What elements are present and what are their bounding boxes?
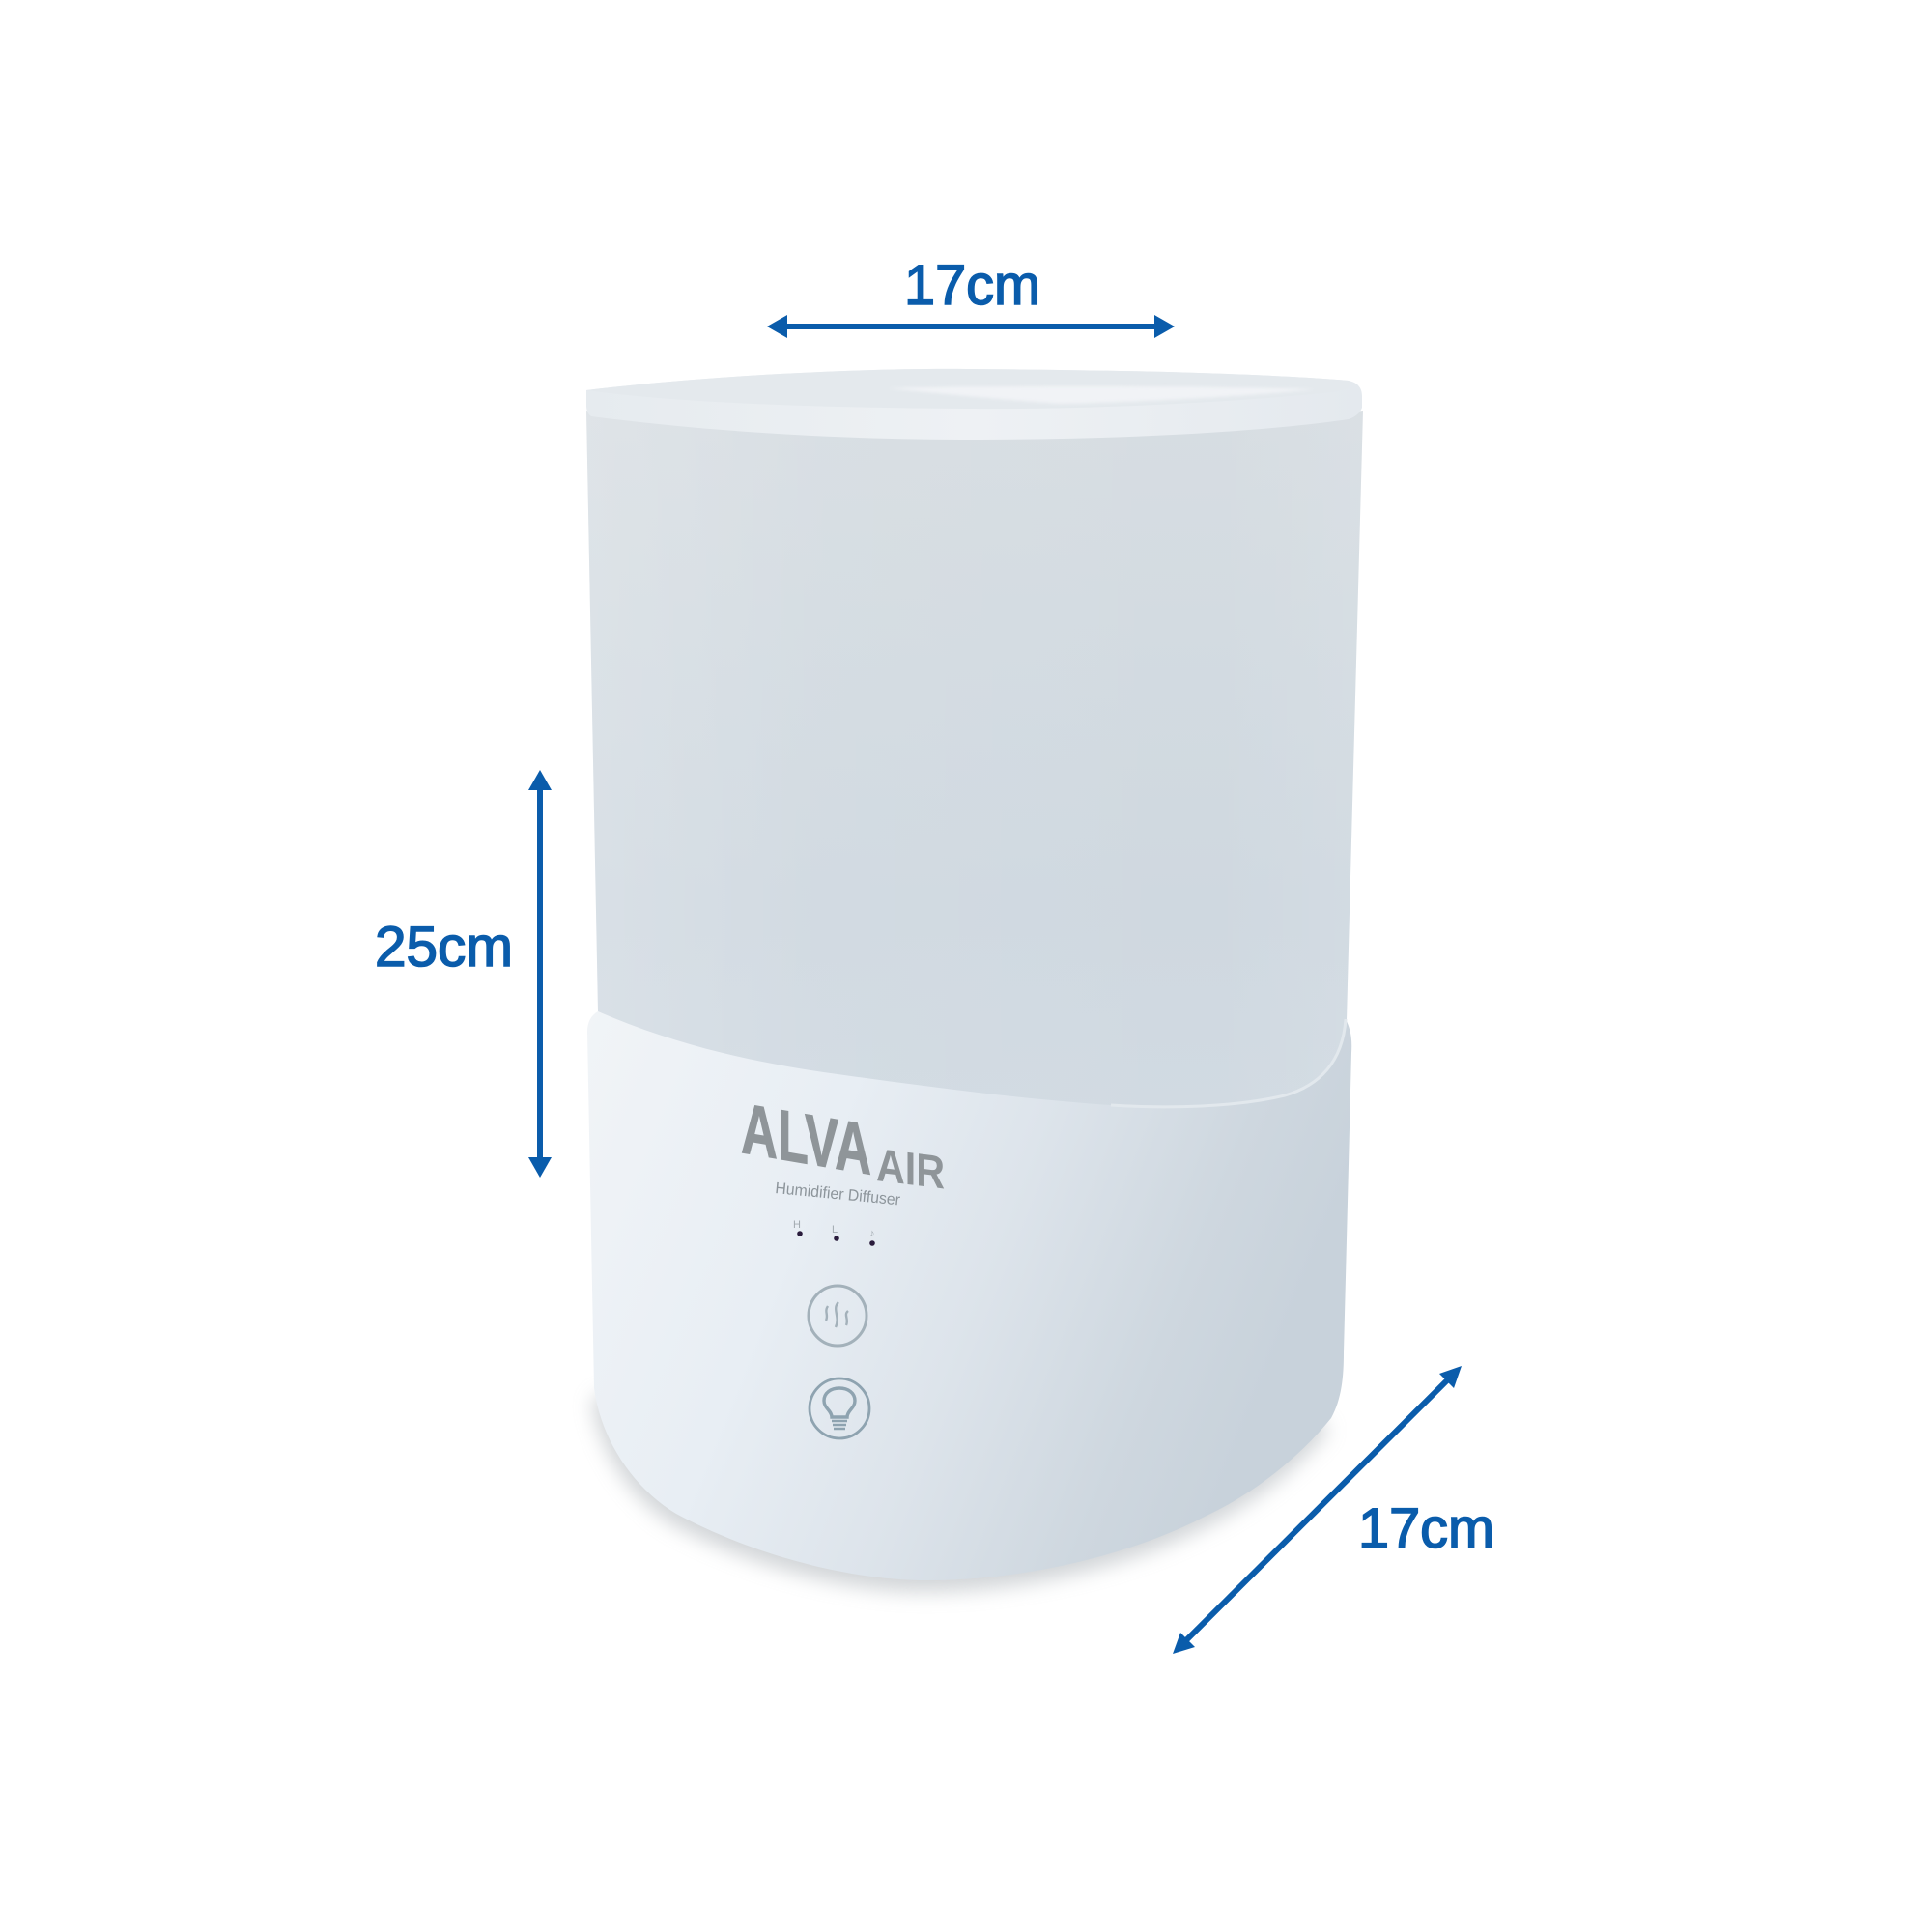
shadow under humidifier xyxy=(592,1364,1329,1592)
label: top width: 17cm xyxy=(904,254,1040,317)
ALVA wordmark: ALVA xyxy=(741,1088,871,1190)
indicator lights xyxy=(793,1219,875,1246)
logo: ALVA AIR xyxy=(741,1088,945,1199)
icon: mist button xyxy=(809,1286,867,1346)
arrow: height xyxy=(528,770,552,1178)
indicator lights: H xyxy=(793,1219,801,1231)
AIR wordmark: AIR xyxy=(876,1139,945,1199)
arrow: depth xyxy=(1173,1366,1462,1654)
product name: Humidifier Diffuser xyxy=(775,1179,901,1208)
label: depth: 17cm xyxy=(1358,1497,1494,1560)
arrow: top width xyxy=(767,315,1175,338)
sleeve rim highlight xyxy=(1111,1019,1346,1107)
water tank body xyxy=(586,411,1363,1121)
icon: light button xyxy=(810,1378,869,1438)
humidifier product xyxy=(586,369,1363,1580)
indicator lights: L xyxy=(832,1224,838,1236)
label: height: 25cm xyxy=(375,916,513,979)
base sleeve xyxy=(587,1011,1351,1580)
lid xyxy=(586,369,1362,440)
indicator lights: ♪ xyxy=(869,1228,875,1239)
